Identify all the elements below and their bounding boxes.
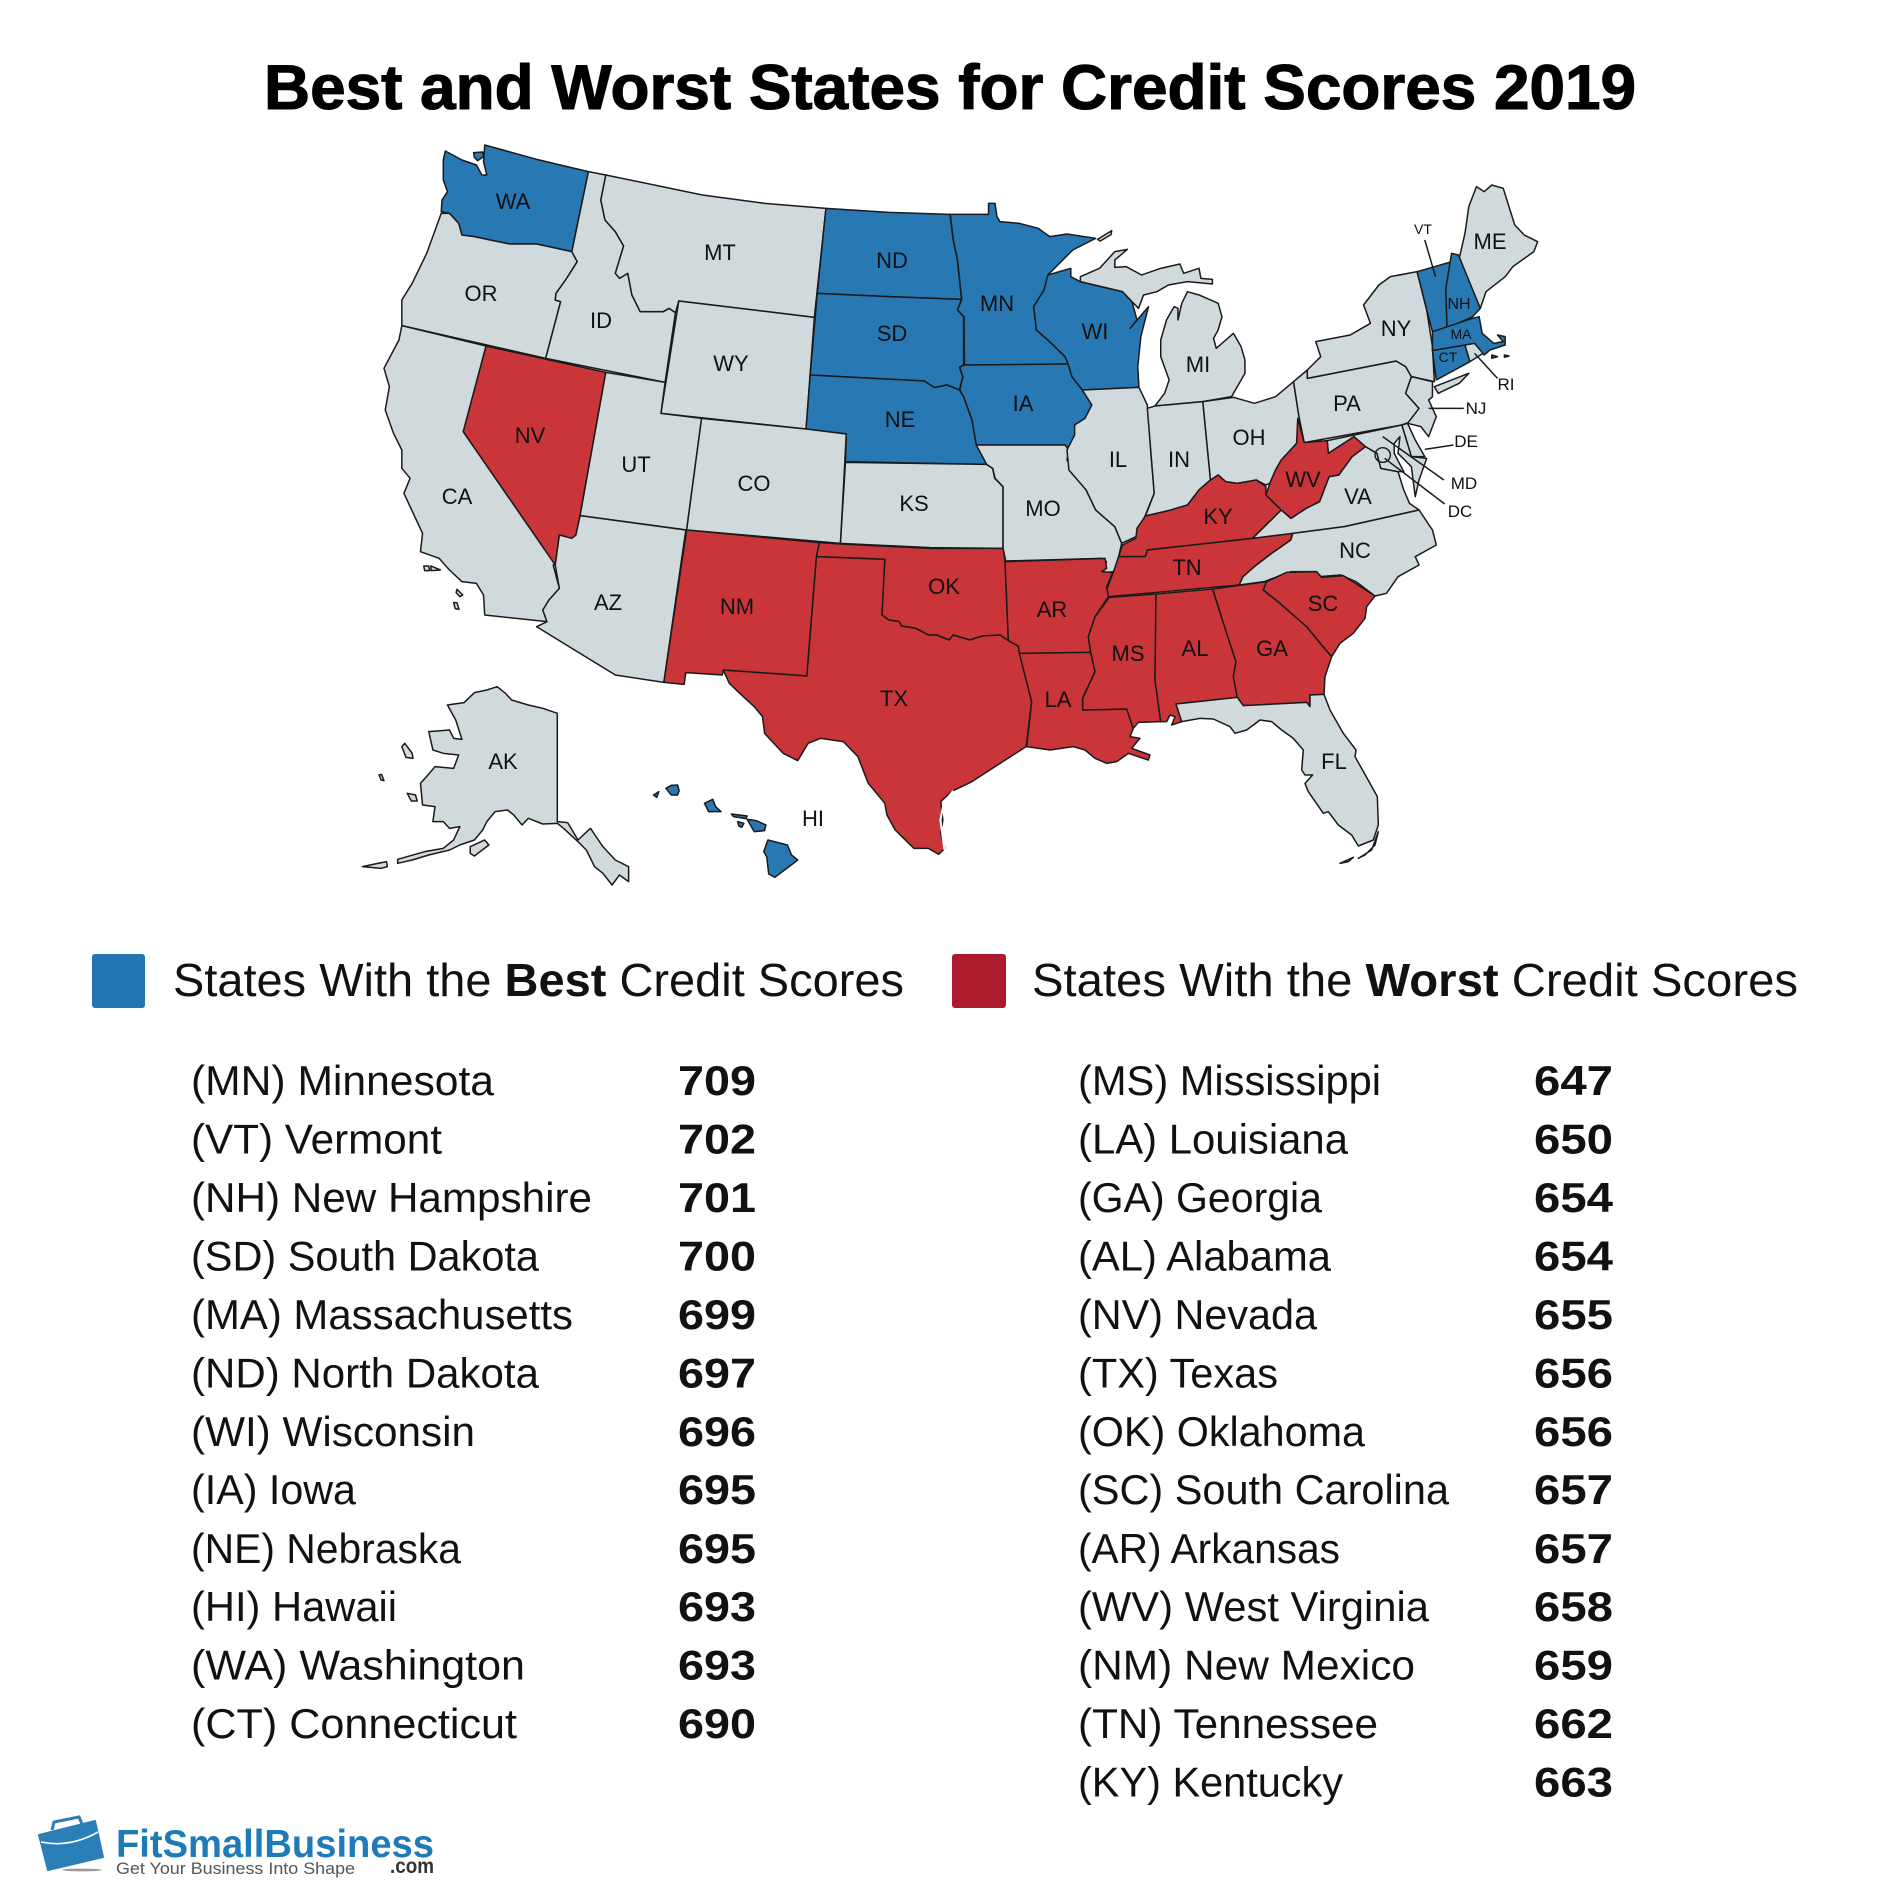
icon: briefcase (39, 1817, 103, 1871)
state: WV (1266, 418, 1365, 518)
row: Vermont: 702 (678, 1116, 756, 1163)
row: New Mexico: (NM) New Mexico (1078, 1642, 1415, 1689)
row: New Hampshire: 701 (678, 1174, 756, 1221)
state abbreviation labels: AK (488, 749, 518, 774)
row: Mississippi (1078, 1057, 1613, 1104)
state abbreviation labels: NE (885, 407, 915, 432)
leader lines: small states (1375, 240, 1498, 504)
logo wordmark: FitSmallBusiness (116, 1823, 434, 1866)
row: Arkansas: (AR) Arkansas (1078, 1525, 1340, 1572)
Isle Royale (1098, 231, 1112, 241)
state: OH (1203, 382, 1299, 485)
row: West Virginia (1078, 1583, 1613, 1630)
state: IN (1145, 402, 1210, 516)
row: Nevada (1078, 1291, 1613, 1338)
state abbreviation labels: NJ (1466, 399, 1486, 418)
San Juan islands (474, 152, 483, 161)
row: New Mexico: 659 (1534, 1642, 1613, 1689)
state: WI (1034, 268, 1148, 390)
row: Connecticut: 690 (678, 1700, 756, 1747)
legend swatch: blue (92, 954, 145, 1008)
state: FL (1176, 694, 1378, 863)
state: NJ (1406, 377, 1436, 437)
row: Kentucky: (KY) Kentucky (1078, 1759, 1343, 1806)
state: KY (1119, 475, 1281, 557)
row: Washington (191, 1642, 756, 1689)
state abbreviation labels: NY (1381, 316, 1412, 341)
row: Minnesota: (MN) Minnesota (191, 1057, 495, 1104)
state: AL (1155, 589, 1237, 725)
row: Tennessee (1078, 1700, 1613, 1747)
state: ND (817, 208, 962, 299)
row: South Dakota: 700 (678, 1233, 756, 1280)
state: WA (441, 145, 588, 252)
state: NH (1446, 253, 1480, 328)
state abbreviation labels: KY (1203, 504, 1233, 529)
state abbreviation labels: CA (442, 484, 473, 509)
state: MS (1083, 594, 1161, 728)
row: Oklahoma (1078, 1408, 1613, 1455)
state abbreviation labels: ME (1474, 229, 1506, 254)
southern states group (1005, 558, 1378, 863)
state: TX (723, 557, 1032, 854)
legend text: worst: States With the Worst Credit Scores (1032, 954, 1798, 1006)
state abbreviation labels: OK (928, 574, 960, 599)
state abbreviation labels: LA (1045, 687, 1072, 712)
logo tagline: Get Your Business Into Shape (116, 1859, 355, 1878)
state abbreviation labels: NC (1339, 538, 1371, 563)
state: AR (1005, 558, 1113, 653)
state: NM (664, 530, 819, 684)
state: NC (1239, 510, 1436, 596)
row: Tennessee: 662 (1534, 1700, 1613, 1747)
state abbreviation labels: DC (1448, 502, 1472, 521)
legend: worst (952, 954, 1798, 1008)
state abbreviation labels: MS (1112, 641, 1144, 666)
state: AZ (537, 516, 686, 682)
state abbreviation labels: OR (464, 281, 498, 306)
state abbreviation labels: WI (1082, 319, 1108, 344)
state abbreviation labels: SD (877, 321, 907, 346)
state abbreviation labels: HI (802, 806, 824, 831)
row: Oklahoma: (OK) Oklahoma (1078, 1408, 1366, 1455)
row: Washington: (WA) Washington (191, 1642, 525, 1689)
US map (362, 145, 1538, 885)
row: Louisiana: (LA) Louisiana (1078, 1116, 1349, 1163)
row: Alabama: 654 (1534, 1233, 1614, 1280)
state abbreviation labels: ND (876, 248, 908, 273)
state abbreviation labels: TN (1172, 555, 1202, 580)
state: MD (1327, 425, 1427, 497)
best states list (191, 1057, 756, 1747)
row: Connecticut: (CT) Connecticut (191, 1700, 517, 1747)
state: OK (816, 543, 1008, 641)
state: VA (1253, 447, 1419, 538)
state abbreviation labels: NM (720, 594, 754, 619)
row: Louisiana: 650 (1534, 1116, 1613, 1163)
state abbreviation labels: AZ (594, 590, 622, 615)
state: SC (1263, 572, 1375, 657)
row: Nebraska: (NE) Nebraska (191, 1525, 462, 1572)
state: MN (950, 203, 1096, 365)
FitSmallBusiness logo (39, 1817, 434, 1878)
row: Tennessee: (TN) Tennessee (1078, 1700, 1378, 1747)
legend swatch: red (952, 954, 1006, 1008)
state abbreviation labels: WY (713, 351, 749, 376)
row: Massachusetts: 699 (678, 1291, 756, 1338)
row: Hawaii (191, 1583, 756, 1630)
row: North Dakota: (ND) North Dakota (191, 1350, 540, 1397)
state: KS (840, 462, 1003, 548)
state: UT (580, 372, 702, 530)
row: Connecticut (191, 1700, 756, 1747)
state abbreviation labels: MI (1186, 352, 1210, 377)
row: Georgia: 654 (1534, 1174, 1614, 1221)
state: OR (402, 213, 577, 358)
state: NY (1307, 272, 1469, 393)
state abbreviation labels: IL (1109, 447, 1127, 472)
state: IA (960, 364, 1092, 450)
row: North Dakota (191, 1350, 756, 1397)
state abbreviation labels: CT (1439, 349, 1458, 365)
state abbreviation labels: OH (1232, 425, 1266, 450)
row: North Dakota: 697 (678, 1350, 756, 1397)
Padre Island lagoon (940, 791, 953, 850)
title: Best and Worst States for Credit Scores 2019 (264, 53, 1636, 123)
western states group (362, 145, 1032, 885)
row: Nevada: (NV) Nevada (1078, 1291, 1318, 1338)
state abbreviation labels: VT (1414, 221, 1432, 237)
state: NE (806, 375, 986, 464)
row: Arkansas: 657 (1534, 1525, 1613, 1572)
row: Mississippi: (MS) Mississippi (1078, 1057, 1381, 1104)
state abbreviation labels: GA (1256, 636, 1288, 661)
row: Georgia (1078, 1174, 1614, 1221)
state: SD (810, 293, 964, 390)
state: LA (1019, 652, 1150, 763)
state abbreviation labels: NV (515, 423, 546, 448)
state abbreviation labels: AL (1182, 636, 1208, 661)
state abbreviation labels: MD (1451, 474, 1477, 493)
state: PA (1294, 361, 1419, 443)
state: MA (1432, 317, 1509, 358)
row: Nebraska (191, 1525, 756, 1572)
state abbreviation labels: FL (1321, 749, 1347, 774)
row: South Dakota: (SD) South Dakota (191, 1233, 540, 1280)
legend text: best: States With the Best Credit Scores (173, 954, 904, 1006)
state abbreviation labels: IN (1168, 447, 1190, 472)
state abbreviation labels: MN (980, 291, 1014, 316)
row: South Carolina: 657 (1534, 1466, 1613, 1513)
state abbreviation labels: ID (590, 308, 612, 333)
state: MO (976, 445, 1122, 573)
state: AK (398, 687, 629, 885)
state: MI (1080, 249, 1245, 406)
row: Iowa: 695 (678, 1466, 756, 1513)
state abbreviation labels: WV (1285, 467, 1321, 492)
state abbreviation labels: WA (496, 189, 531, 214)
central and northeastern states group (950, 185, 1538, 597)
legend: best (92, 954, 904, 1008)
row: Oklahoma: 656 (1534, 1408, 1613, 1455)
state: CT (1432, 345, 1470, 380)
state abbreviation labels: IA (1013, 391, 1034, 416)
state abbreviation labels: VA (1344, 484, 1372, 509)
row: Hawaii: 693 (678, 1583, 756, 1630)
state: GA (1213, 582, 1332, 707)
row: Hawaii: (HI) Hawaii (191, 1583, 397, 1630)
row: Nebraska: 695 (678, 1525, 756, 1572)
row: Arkansas (1078, 1525, 1613, 1572)
row: Kentucky: 663 (1534, 1759, 1613, 1806)
state abbreviation labels: PA (1333, 391, 1361, 416)
row: Vermont: (VT) Vermont (191, 1116, 442, 1163)
state: HI (653, 785, 798, 877)
row: New Mexico (1078, 1642, 1613, 1689)
state abbreviation labels: MO (1025, 496, 1061, 521)
row: Iowa: (IA) Iowa (191, 1466, 357, 1513)
row: New Hampshire: (NH) New Hampshire (191, 1174, 592, 1221)
row: Iowa (191, 1466, 756, 1513)
row: Wisconsin: (WI) Wisconsin (191, 1408, 475, 1455)
state abbreviation labels: AR (1037, 597, 1067, 622)
row: Nevada: 655 (1534, 1291, 1613, 1338)
row: Wisconsin (191, 1408, 756, 1455)
row: Alabama (1078, 1233, 1614, 1280)
state abbreviation labels: NH (1447, 296, 1471, 313)
row: Washington: 693 (678, 1642, 756, 1689)
state abbreviation labels: CO (738, 471, 770, 496)
row: South Carolina: (SC) South Carolina (1078, 1466, 1450, 1513)
state: RI (1465, 343, 1483, 362)
logo .com: .com (390, 1855, 434, 1878)
state: ID (546, 172, 675, 382)
state: WY (661, 301, 814, 429)
state: CA (384, 326, 559, 622)
row: South Dakota (191, 1233, 756, 1280)
row: Texas (1078, 1350, 1613, 1397)
row: Minnesota: 709 (678, 1057, 756, 1104)
state: ME (1458, 185, 1538, 308)
row: Minnesota (191, 1057, 756, 1104)
row: Texas: 656 (1534, 1350, 1613, 1397)
row: Georgia: (GA) Georgia (1078, 1174, 1323, 1221)
state abbreviation labels: DE (1454, 432, 1478, 451)
state: CO (687, 418, 846, 543)
row: Massachusetts (191, 1291, 756, 1338)
state abbreviation labels (442, 189, 1514, 831)
row: Louisiana (1078, 1116, 1613, 1163)
state abbreviation labels: MT (704, 240, 736, 265)
row: Texas: (TX) Texas (1078, 1350, 1278, 1397)
row: Kentucky (1078, 1759, 1613, 1806)
California islands (424, 566, 463, 609)
row: West Virginia: 658 (1534, 1583, 1613, 1630)
state: TN (1105, 533, 1293, 597)
state abbreviation labels: KS (899, 491, 929, 516)
state abbreviation labels: SC (1308, 591, 1338, 616)
state: NV (463, 346, 606, 565)
state abbreviation labels: MA (1450, 326, 1472, 342)
state abbreviation labels: UT (621, 452, 651, 477)
state: DE (1402, 423, 1425, 457)
row: Mississippi: 647 (1534, 1057, 1613, 1104)
Alaska islands (362, 743, 489, 868)
state abbreviation labels: TX (880, 686, 908, 711)
state: IL (1067, 387, 1154, 543)
row: West Virginia: (WV) West Virginia (1078, 1583, 1430, 1630)
row: Massachusetts: (MA) Massachusetts (191, 1291, 573, 1338)
row: Wisconsin: 696 (678, 1408, 756, 1455)
row: Vermont (191, 1116, 756, 1163)
row: Alabama: (AL) Alabama (1078, 1233, 1332, 1280)
state abbreviation labels: RI (1498, 375, 1514, 394)
worst states list (1078, 1057, 1614, 1806)
state: VT (1417, 262, 1452, 332)
state: MT (601, 175, 826, 317)
